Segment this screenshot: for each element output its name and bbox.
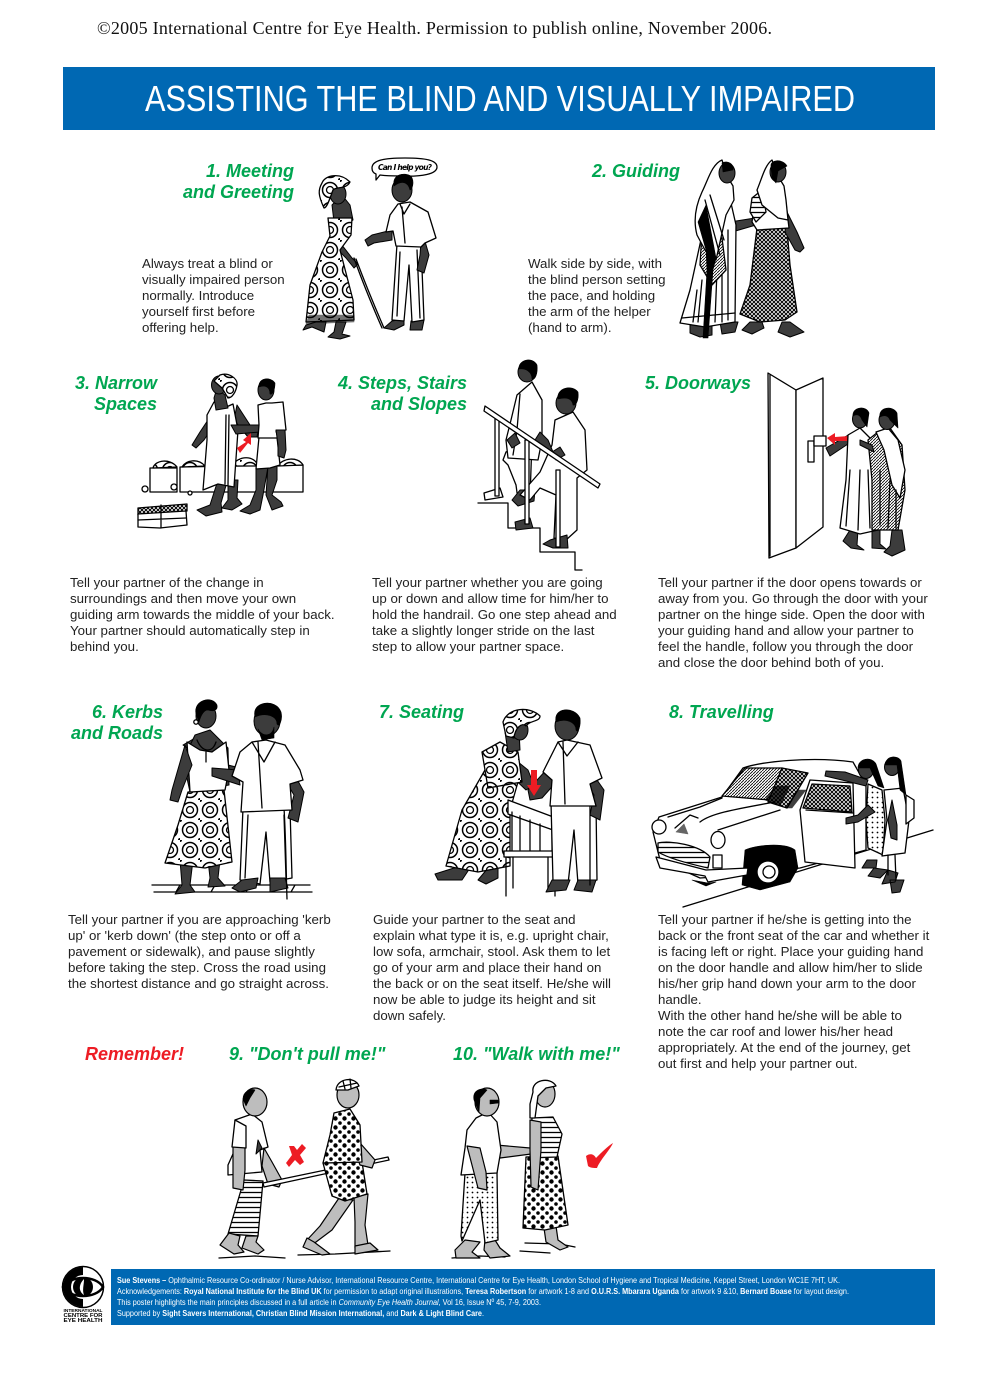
footer credits panel: This poster highlights the main principles discussed in a full article in Community Eye Health Journal, Vol 16, Issue Nº 45, 7-9, 2003. (117, 1297, 541, 1307)
illustration: people passing through a door (767, 372, 906, 559)
heading: Kerbs and Roads: 6. Kerbs (92, 702, 163, 722)
text: doorways advice: your guiding hand and allow your partner to (658, 623, 914, 638)
heading: Meeting and Greeting: and Greeting (183, 182, 294, 202)
text: narrow spaces advice: guiding arm towards the middle of your back. (70, 607, 335, 622)
text: doorways advice (658, 575, 928, 670)
heading: Seating: 7. Seating (379, 702, 464, 722)
footer credits panel (111, 1269, 935, 1325)
copyright line: ©2005 International Centre for Eye Health. Permission to publish online, November 2006. (97, 18, 772, 38)
text: kerbs advice: the shortest distance and go straight across. (68, 976, 329, 991)
text: stairs advice: hold the handrail. Go one step ahead and (372, 607, 617, 622)
illustration: blind person being guided into a car (651, 756, 934, 908)
text: doorways advice: feel the handle, follow you through the door (658, 639, 913, 654)
text: narrow spaces advice (70, 575, 335, 654)
text: travelling advice: out first and help your partner out. (658, 1056, 858, 1071)
text: doorways advice: away from you. Go through the door with your (658, 591, 928, 606)
text: stairs advice: Tell your partner whether you are going (372, 575, 603, 590)
text: guiding advice: the blind person setting (528, 272, 666, 287)
text: travelling advice: his/her grip hand down your arm to the door (658, 976, 916, 991)
illustration: man greeting a blind woman (302, 157, 438, 340)
heading: Doorways: 5. Doorways (645, 373, 751, 393)
footer credits panel: Acknowledgements: Royal National Institute for the Blind UK for permission to adapt original illustrations, Teresa Robertson for artwork 1-8 and O.U.R.S. Mbarara Uganda for artwork 9 &10, Bernard Boase for layout design. (117, 1286, 849, 1296)
text: stairs advice (372, 575, 617, 654)
panel: 10. Walk with me (451, 1044, 620, 1259)
text: meeting advice: normally. Introduce (142, 288, 254, 303)
heading: Travelling: 8. Travelling (669, 702, 774, 722)
text: seating advice (373, 912, 611, 1023)
text: guiding advice: Walk side by side, with (528, 256, 662, 271)
text: seating advice: explain what type it is, e.g. upright chair, (373, 928, 609, 943)
illustration: walking in single file between market boxes (137, 374, 304, 529)
illustration: person correctly holding helper's arm (451, 1080, 613, 1259)
logo: International Centre for Eye Health (62, 1266, 104, 1324)
text: narrow spaces advice: Tell your partner of the change in (70, 575, 264, 590)
heading: Remember!: Remember! (85, 1044, 184, 1064)
illustration: man guiding a woman to a chair (434, 708, 604, 897)
heading: Steps, Stairs and Slopes: and Slopes (371, 394, 467, 414)
panel: 5. Doorways (645, 372, 928, 670)
heading: Steps, Stairs and Slopes: 4. Steps, Stairs (338, 373, 467, 393)
text: seating advice: down safely. (373, 1008, 446, 1023)
text: seating advice: now be able to judge its height and sit (373, 992, 596, 1007)
text: kerbs advice: Tell your partner if you are approaching 'kerb (68, 912, 331, 927)
text: doorways advice: Tell your partner if the door opens towards or (658, 575, 922, 590)
illustration: two women walking, one holding the other's arm (679, 159, 804, 338)
heading: Narrow Spaces (75, 373, 158, 414)
text: meeting advice (142, 256, 285, 335)
text: narrow spaces advice: behind you. (70, 639, 139, 654)
text: stairs advice: step to allow your partner space. (372, 639, 564, 654)
panel: 9. Don't pull me (218, 1044, 391, 1259)
text: travelling advice: appropriately. At the end of the journey, get (658, 1040, 910, 1055)
heading: Meeting and Greeting (183, 161, 294, 202)
text: narrow spaces advice: Your partner should automatically step in (70, 623, 310, 638)
text: travelling advice: Tell your partner if he/she is getting into the (658, 912, 912, 927)
panel: 4. Steps, Stairs and Slopes (338, 360, 617, 654)
text: kerbs advice (68, 912, 331, 991)
heading: Kerbs and Roads: and Roads (71, 723, 163, 743)
text: stairs advice: take a slightly longer stride on the last (372, 623, 594, 638)
heading: Narrow Spaces: 3. Narrow (75, 373, 157, 393)
text: travelling advice: handle. (658, 992, 702, 1007)
illustration: man pulling a blind person by a stick (218, 1078, 391, 1259)
text: meeting advice: Always treat a blind or (142, 256, 273, 271)
text: guiding advice: the pace, and holding (528, 288, 655, 303)
text: kerbs advice: before taking the step. Cross the road using (68, 960, 326, 975)
illustration: man and woman at a kerb (151, 699, 313, 900)
title banner (63, 67, 935, 130)
heading: Meeting and Greeting: 1. Meeting (206, 161, 294, 181)
text: kerbs advice: pavement or sidewalk), and pause slightly (68, 944, 315, 959)
text: guiding advice (528, 256, 666, 335)
panel: 2. Guiding (528, 159, 804, 338)
text: stairs advice: up or down and allow time for him/her to (372, 591, 609, 606)
panel: 6. Kerbs and Roads (68, 699, 331, 991)
text: guiding advice: (hand to arm). (528, 320, 612, 335)
text: guiding advice: the arm of the helper (528, 304, 651, 319)
logo: International Centre for Eye Health: EYE HEALTH (64, 1318, 103, 1324)
text: travelling advice (658, 912, 930, 1071)
illustration: two men on stairs holding a handrail (477, 360, 601, 571)
panel: 3. Narrow Spaces (70, 373, 335, 654)
text: doorways advice: and close the door behind both of you. (658, 655, 884, 670)
heading: Guiding: 2. Guiding (592, 161, 680, 181)
panel: 1. Meeting and Greeting (142, 157, 438, 340)
panel: 7. Seating (373, 702, 611, 1023)
heading: Narrow Spaces: Spaces (94, 394, 157, 414)
logo: International Centre for Eye Health: CENTRE FOR (64, 1313, 103, 1319)
heading: Don't pull me: 9. "Don't pull me!" (229, 1044, 385, 1064)
text: travelling advice: note the car roof and lower his/her head (658, 1024, 893, 1039)
text: meeting advice: visually impaired person (142, 272, 285, 287)
text: meeting advice: offering help. (142, 320, 219, 335)
heading: Steps, Stairs and Slopes (338, 373, 467, 414)
footer credits panel: Supported by Sight Savers International, Christian Blind Mission International, and Dark & Light Blind Care. (117, 1308, 484, 1318)
text: doorways advice: partner on the hinge side. Open the door with (658, 607, 925, 622)
text: travelling advice: on the door handle and allow him/her to slide (658, 960, 923, 975)
text: seating advice: go of your arm and place their hand on (373, 960, 601, 975)
text: seating advice: the back or on the seat itself. He/she will (373, 976, 611, 991)
text: travelling advice: back or the front seat of the car and whether it (658, 928, 929, 943)
logo: International Centre for Eye Health: INTERNATIONAL (64, 1308, 103, 1313)
text: meeting advice: yourself first before (142, 304, 255, 319)
text: kerbs advice: up' or 'kerb down' (the step onto or off a (68, 928, 301, 943)
text: travelling advice: With the other hand he/she will be able to (658, 1008, 902, 1023)
heading: Kerbs and Roads (71, 702, 163, 743)
text: seating advice: low sofa, armchair, stool. Ask them to let (373, 944, 610, 959)
text: seating advice: Guide your partner to the seat and (373, 912, 576, 927)
heading: Walk with me: 10. "Walk with me!" (453, 1044, 620, 1064)
text: narrow spaces advice: surroundings and then move your own (70, 591, 296, 606)
text: travelling advice: is facing left or right. Place your guiding hand (658, 944, 923, 959)
panel: 8. Travelling (651, 702, 934, 1071)
illustration: man greeting a blind woman: Can I help you? (378, 163, 433, 172)
